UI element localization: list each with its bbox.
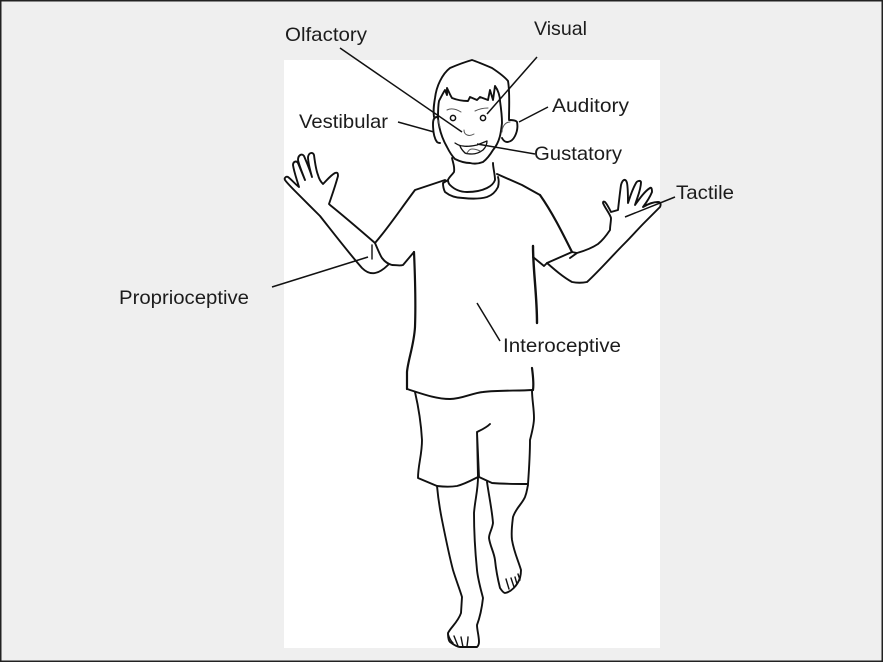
left ear <box>433 117 440 143</box>
leader line: visual <box>487 57 537 114</box>
label: Interoceptive: Interoceptive <box>503 335 621 357</box>
label: Proprioceptive: Proprioceptive <box>119 287 249 309</box>
leader line: interoceptive <box>477 303 500 341</box>
right toes <box>506 574 520 589</box>
leader line: vestibular <box>398 122 434 132</box>
eyebrows <box>447 108 488 112</box>
boy figure <box>285 60 661 647</box>
left toes <box>448 633 468 647</box>
nose <box>464 130 474 135</box>
label: Vestibular: Vestibular <box>299 111 389 133</box>
t-shirt <box>375 180 445 265</box>
label: Gustatory: Gustatory <box>534 143 622 165</box>
white figure panel <box>284 60 660 648</box>
leader line: auditory <box>519 107 548 122</box>
shorts <box>415 390 534 487</box>
label: Tactile: Tactile <box>676 182 734 204</box>
label: Visual: Visual <box>534 18 587 40</box>
right arm and hand <box>547 180 661 283</box>
eyes <box>450 115 486 121</box>
neck and collar <box>443 158 499 199</box>
leader line: proprioceptive <box>272 257 368 287</box>
head and hair <box>433 60 517 164</box>
label: Auditory: Auditory <box>552 95 629 117</box>
mouth <box>455 141 487 154</box>
right ear <box>502 120 517 142</box>
leader line: tactile <box>625 197 675 217</box>
right leg and foot <box>487 482 528 593</box>
label: Olfactory: Olfactory <box>285 24 367 46</box>
leader line: olfactory <box>340 48 462 132</box>
left arm and hand <box>285 153 388 273</box>
leader line: gustatory <box>477 144 535 154</box>
left leg and foot <box>437 477 483 647</box>
